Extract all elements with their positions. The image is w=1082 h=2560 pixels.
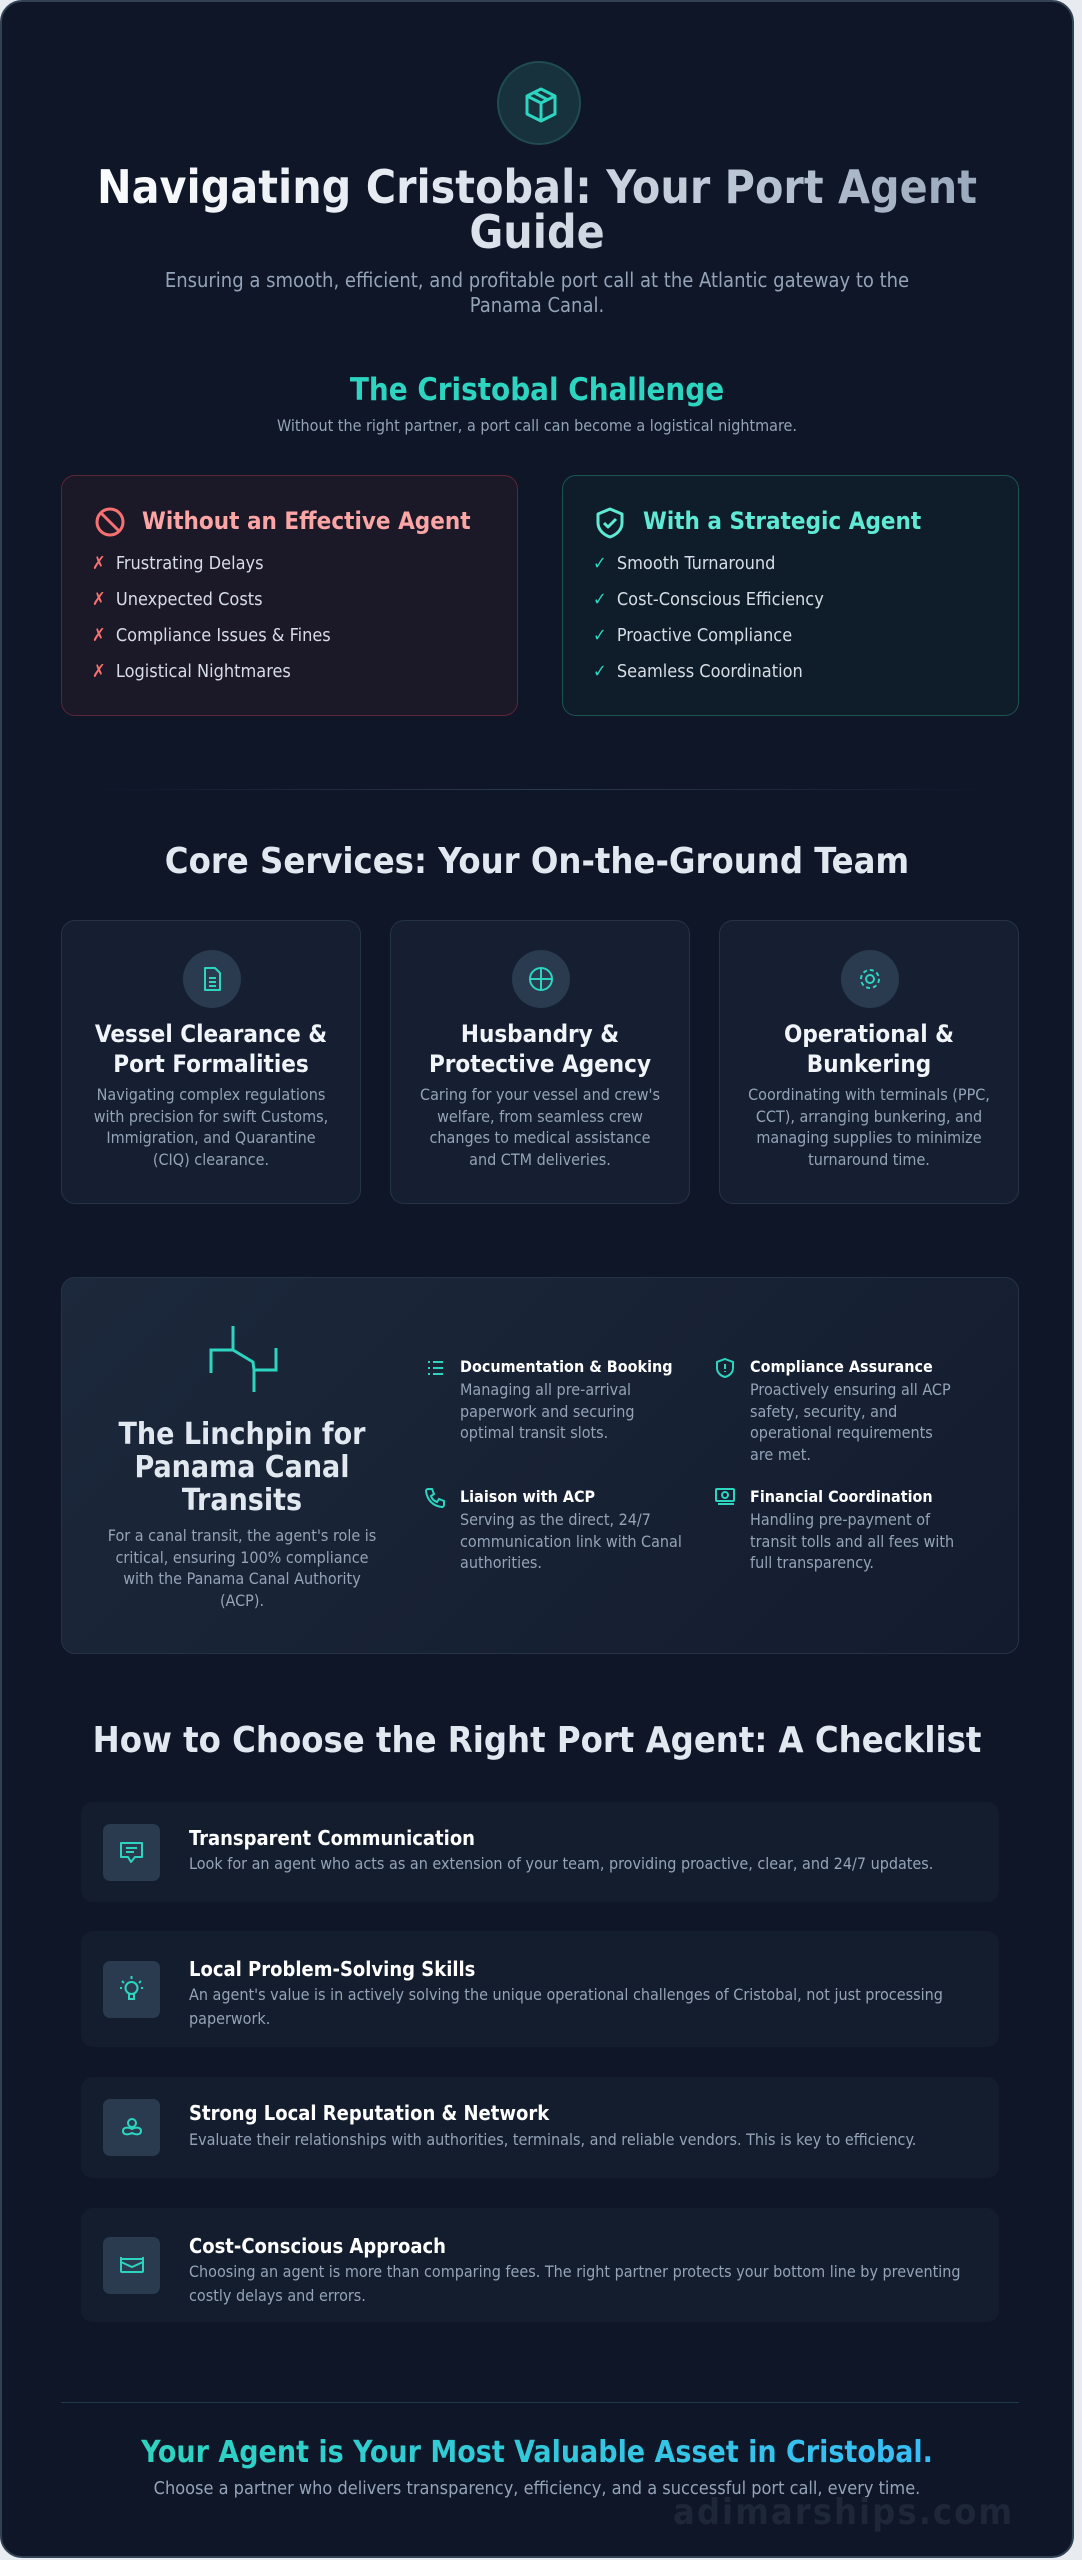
checklist item: reputation: Evaluate their relationships with authorities, terminals, and reliable vendors. This is key to efficiency. bbox=[189, 2130, 916, 2149]
icon: lightbulb bbox=[103, 1961, 160, 2018]
challenge subtitle: Without the right partner, a port call can become a logistical nightmare. bbox=[277, 416, 797, 435]
icon: network bbox=[103, 2099, 160, 2156]
service card: husbandry: Caring for your vessel and crew's welfare, from seamless crew changes to medical assistance and CTM deliveries. bbox=[420, 1085, 660, 1168]
item: financial: Financial Coordination bbox=[750, 1487, 933, 1506]
icon: prohibited bbox=[96, 508, 124, 536]
item: compliance bbox=[716, 1357, 951, 1464]
item: documentation bbox=[428, 1357, 673, 1442]
checklist item: cost: Cost-Conscious Approach bbox=[189, 2234, 446, 2258]
item: compliance: Compliance Assurance bbox=[750, 1357, 933, 1376]
icon: shield check bbox=[596, 508, 624, 538]
checklist item: communication: Transparent Communication bbox=[189, 1826, 475, 1850]
checklist item: problem solving bbox=[81, 1931, 999, 2047]
panel: with agent: ✓ Seamless Coordination bbox=[593, 661, 803, 682]
icon: canal locks bbox=[210, 1326, 278, 1392]
icon: gear bbox=[841, 950, 899, 1008]
checklist item: cost bbox=[81, 2208, 999, 2322]
service card: operational bbox=[719, 920, 1019, 1204]
item: compliance: Proactively ensuring all ACP safety, security, and operational requirements are met. bbox=[750, 1380, 951, 1464]
service card: husbandry: Husbandry & bbox=[461, 1020, 619, 1048]
item: liaison: Liaison with ACP bbox=[460, 1487, 595, 1506]
panel: without agent: ✗ Logistical Nightmares bbox=[92, 661, 291, 682]
icon: cube header bbox=[497, 61, 581, 145]
item: documentation: Managing all pre-arrival paperwork and securing optimal transit slots. bbox=[460, 1380, 635, 1442]
checklist item: reputation bbox=[81, 2077, 999, 2178]
service card: operational: Operational & bbox=[784, 1020, 954, 1048]
panel: without agent bbox=[61, 475, 518, 716]
checklist item: cost: Choosing an agent is more than comparing fees. The right partner protects your bottom line by preventing costly delays and errors. bbox=[189, 2262, 960, 2305]
service card: clearance: Vessel Clearance & bbox=[95, 1020, 327, 1048]
item: financial: Handling pre-payment of transit tolls and all fees with full transparency. bbox=[750, 1510, 954, 1572]
panel: with agent: ✓ Smooth Turnaround bbox=[593, 553, 775, 574]
panel: without agent: Without an Effective Agent bbox=[142, 507, 471, 535]
item: financial bbox=[715, 1487, 954, 1572]
panel: with agent: ✓ Proactive Compliance bbox=[593, 625, 792, 646]
heading: checklist: How to Choose the Right Port Agent: A Checklist bbox=[93, 1720, 981, 1761]
title: Navigating Cristobal: Your Port Agent Guide bbox=[97, 160, 977, 259]
panel: with agent: ✓ Cost-Conscious Efficiency bbox=[593, 589, 824, 610]
panel: without agent: ✗ Compliance Issues & Fines bbox=[92, 625, 331, 646]
heading: core services: Core Services: Your On-the-Ground Team bbox=[165, 841, 909, 882]
checklist item: problem solving: Local Problem-Solving Skills bbox=[189, 1957, 475, 1981]
service card: husbandry: Protective Agency bbox=[429, 1050, 651, 1078]
panel: with agent bbox=[562, 475, 1019, 716]
footer heading: Your Agent is Your Most Valuable Asset in Cristobal. bbox=[141, 2435, 933, 2470]
icon: chat bbox=[103, 1824, 160, 1881]
footer subtitle: Choose a partner who delivers transparency, efficiency, and a successful port call, every time. bbox=[154, 2478, 920, 2499]
checklist item: communication bbox=[81, 1802, 999, 1902]
subtitle: Ensuring a smooth, efficient, and profitable port call at the Atlantic gateway to the Panama Canal. bbox=[165, 268, 909, 317]
panel: without agent: ✗ Unexpected Costs bbox=[92, 589, 263, 610]
service card: husbandry bbox=[390, 920, 690, 1204]
icon: globe bbox=[512, 950, 570, 1008]
panel: linchpin bbox=[61, 1277, 1019, 1654]
checklist item: communication: Look for an agent who acts as an extension of your team, providing proactive, clear, and 24/7 updates. bbox=[189, 1854, 933, 1873]
icon: money bbox=[103, 2237, 160, 2294]
item: liaison: Serving as the direct, 24/7 communication link with Canal authorities. bbox=[460, 1510, 682, 1572]
service card: operational: Coordinating with terminals (PPC, CCT), arranging bunkering, and managing supplies to minimize turnaround time. bbox=[748, 1085, 990, 1168]
heading: The Cristobal Challenge: The Cristobal Challenge bbox=[350, 372, 724, 408]
service card: clearance bbox=[61, 920, 361, 1204]
item: liaison bbox=[425, 1487, 682, 1572]
panel: with agent: With a Strategic Agent bbox=[643, 507, 921, 535]
panel: linchpin: The Linchpin for Panama Canal Transits bbox=[118, 1417, 365, 1518]
checklist item: problem solving: An agent's value is in actively solving the unique operational challenges of Cristobal, not just processing paperwork. bbox=[189, 1985, 943, 2028]
icon: document bbox=[183, 950, 241, 1008]
panel: linchpin: For a canal transit, the agent's role is critical, ensuring 100% compliance with the Panama Canal Authority (ACP). bbox=[108, 1526, 376, 1610]
panel: without agent: ✗ Frustrating Delays bbox=[92, 553, 264, 574]
service card: operational: Bunkering bbox=[807, 1050, 931, 1078]
service card: clearance: Navigating complex regulations with precision for swift Customs, Immigration, and Quarantine (CIQ) clearance. bbox=[94, 1085, 328, 1168]
watermark: adimarships.com bbox=[673, 2492, 1014, 2533]
service card: clearance: Port Formalities bbox=[113, 1050, 309, 1078]
item: documentation: Documentation & Booking bbox=[460, 1357, 673, 1376]
checklist item: reputation: Strong Local Reputation & Network bbox=[189, 2101, 549, 2125]
